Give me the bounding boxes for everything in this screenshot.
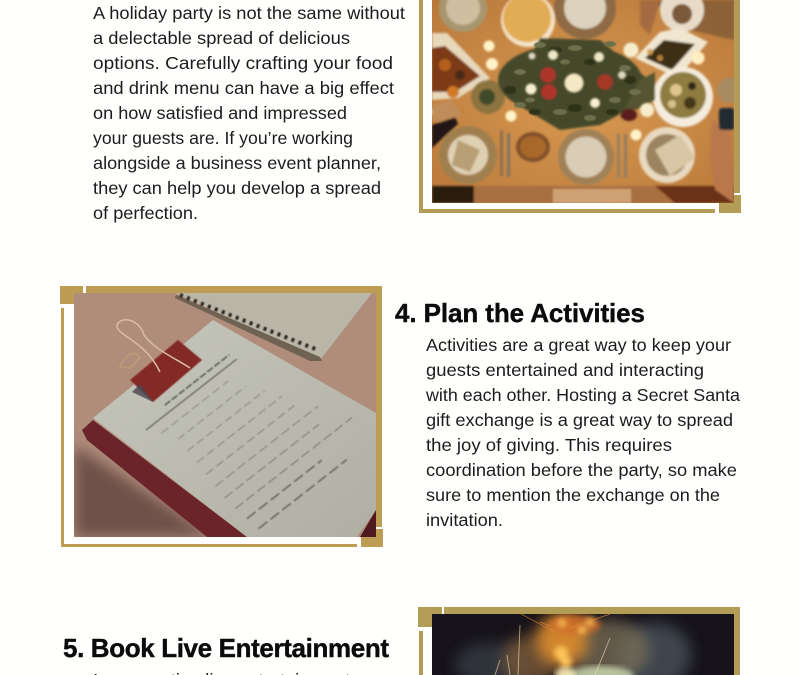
section 3: food and drink text: they can help you develop a spread [93,178,381,198]
section 3: food and drink text: alongside a business event planner, [93,153,381,173]
section 3: food and drink text: a delectable spread of delicious [93,28,350,48]
section 4: activities text: coordination before the party, so make [426,460,737,480]
section 4: activities text: gift exchange is a great way to spread [426,410,733,430]
section 3: food and drink text: A holiday party is not the same without [93,3,405,23]
section 5: gold photo frame [418,607,740,675]
section 4: activities text: the joy of giving. This requires [426,435,672,455]
section 3: food and drink text: of perfection. [93,203,198,223]
section 5: heading: 5. Book Live Entertainment [63,633,389,663]
section 3: food and drink text: options. Carefully crafting your food [93,53,393,73]
section 4: gold photo frame [60,286,383,547]
section 4: activities text: guests entertained and interacting [426,360,704,380]
section 3: photo of holiday table spread [431,0,743,203]
section 4: activities text: with each other. Hosting a Secret Santa [425,385,740,405]
section 4: activities text [425,335,740,530]
section 3: food and drink text [93,3,405,223]
section 4: activities text: invitation. [426,510,503,530]
section 4: photo of handwritten list with binder clip [74,293,376,546]
section 4: heading: 4. Plan the Activities [395,298,645,328]
section 3: food and drink text: and drink menu can have a big effect [93,78,394,98]
section 5: photo of fireworks [432,614,734,675]
section 4: activities text: Activities are a great way to keep your [426,335,731,355]
section 3: food and drink text: on how satisfied and impressed [93,103,347,123]
section 3: food and drink text: your guests are. If you’re working [93,128,353,148]
section 4: activities text: sure to mention the exchange on the [426,485,720,505]
section 3: gold photo frame [419,0,741,213]
